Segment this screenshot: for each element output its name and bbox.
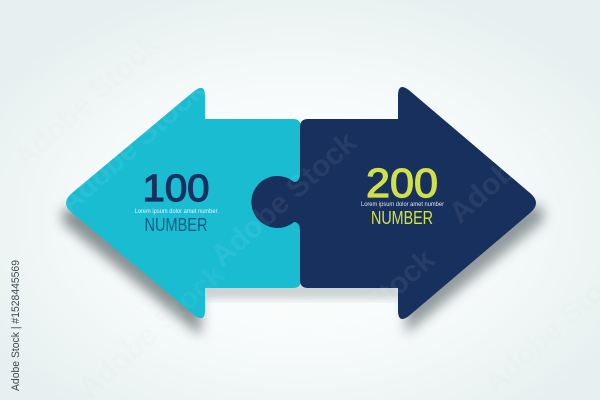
left label block [134,168,218,235]
left caption: Lorem ipsum dolor amet number [134,209,218,215]
right label block [361,160,444,228]
watermark: Adobe Stock [53,73,211,220]
stock id vertical text: Adobe Stock | #1528445569 [10,260,22,391]
right word: NUMBER [371,208,433,228]
right number: 200 [366,160,438,206]
watermark: Adobe Stock [283,243,441,390]
left number: 100 [142,168,210,210]
arrow shadows [62,205,544,336]
watermark: Adobe Stock [205,126,363,273]
watermark: Adobe Stock [8,28,166,175]
watermark: Adobe Stock [443,83,600,230]
right caption: Lorem ipsum dolor amet number [361,202,444,208]
left arrow: cyan puzzle piece [66,88,301,318]
right arrow: navy puzzle piece with knob [251,87,536,319]
left word: NUMBER [144,215,208,235]
